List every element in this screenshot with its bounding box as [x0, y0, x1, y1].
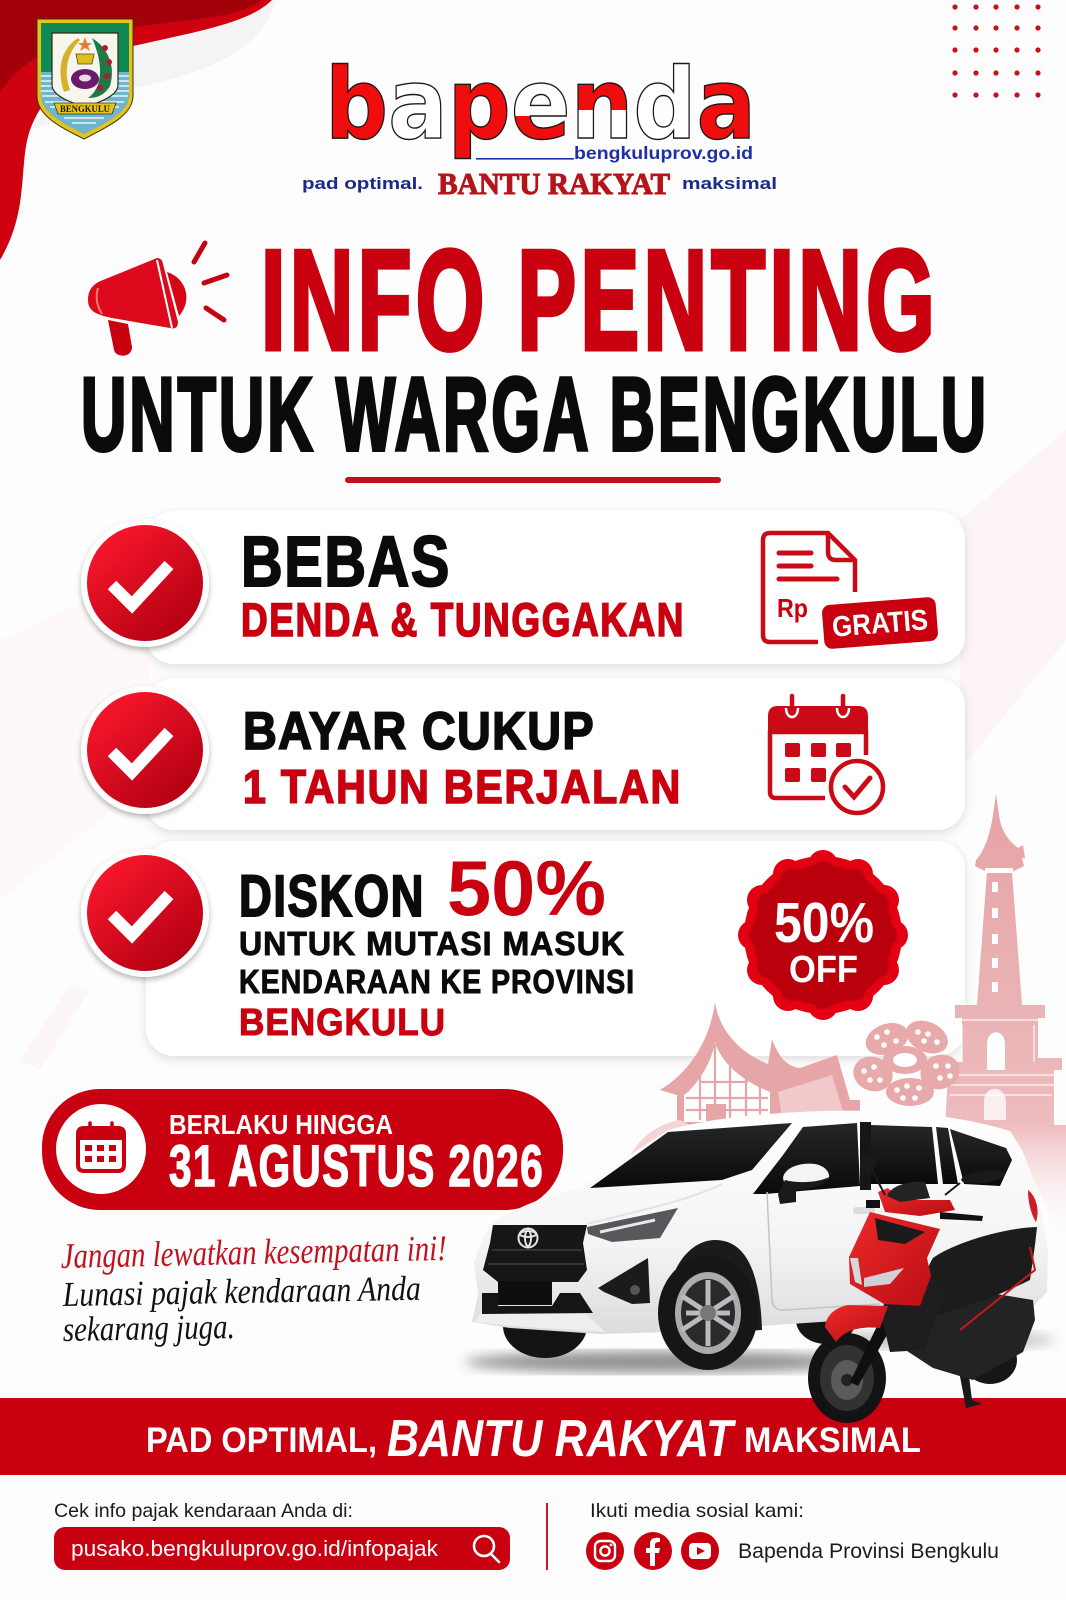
front fork — [850, 1320, 892, 1386]
number plate recess — [498, 1281, 552, 1305]
description line 1: UNTUK MUTASI MASUK — [239, 925, 625, 962]
footer: info text: Cek info pajak kendaraan Anda di: — [54, 1500, 353, 1522]
mirror — [783, 1164, 829, 1188]
tree silhouette — [622, 1120, 700, 1182]
rear windows — [950, 1129, 1012, 1186]
rear wheel — [796, 1296, 856, 1344]
banner: slogan band: PAD OPTIMAL, — [146, 1421, 377, 1460]
hood crease — [587, 1184, 722, 1224]
footer: social name: Bapenda Provinsi Bengkulu — [738, 1540, 999, 1563]
dash dark panel — [875, 1218, 925, 1244]
heading: DISKON: DISKON — [239, 864, 425, 929]
centre black leg shield — [880, 1262, 945, 1352]
mirror right — [960, 1168, 1006, 1186]
seat — [924, 1227, 1037, 1318]
logo url: bengkuluprov.go.id — [574, 143, 753, 163]
far front wheel — [503, 1294, 587, 1358]
label: BERLAKU HINGGA: BERLAKU HINGGA — [169, 1109, 393, 1140]
icon: document with GRATIS stamp — [763, 533, 939, 649]
subheading: DENDA & TUNGGAKAN: DENDA & TUNGGAKAN — [241, 593, 685, 646]
grille — [483, 1225, 587, 1282]
skyline: landmark silhouettes — [622, 794, 1066, 1245]
icon: youtube — [681, 1532, 719, 1570]
subheading: 1 TAHUN BERJALAN: 1 TAHUN BERJALAN — [243, 760, 682, 813]
footer: url pill: pusako.bengkuluprov.go.id/infopajak — [71, 1536, 439, 1561]
door handle — [853, 1207, 875, 1214]
callout: validity pill — [42, 1089, 563, 1210]
car body — [472, 1111, 1048, 1334]
heading: BAYAR CUKUP: BAYAR CUKUP — [243, 702, 595, 761]
windshield — [590, 1123, 792, 1188]
lower skirt — [474, 1314, 605, 1332]
check badge 3 — [81, 849, 209, 977]
icon: document with GRATIS stamp: GRATIS — [831, 604, 929, 644]
pink haze behind vehicles — [880, 1125, 1066, 1245]
badge: 50% off scalloped seal: OFF — [789, 949, 858, 991]
middle window — [871, 1125, 938, 1184]
script line: sekarang juga: sekarang juga. — [62, 1307, 235, 1349]
icon: facebook — [634, 1532, 672, 1570]
fog lamp — [598, 1258, 650, 1304]
toyota emblem — [518, 1228, 538, 1248]
panel: benefit 1 — [81, 511, 965, 664]
front shield — [849, 1212, 940, 1306]
icon: instagram — [586, 1532, 624, 1570]
dot grid top-right — [952, 4, 1041, 98]
banner: slogan band: BANTU RAKYAT — [387, 1410, 737, 1468]
description line 3: BENGKULU — [239, 1002, 446, 1044]
panel: benefit 3 — [81, 841, 965, 1056]
icon: calendar with check — [768, 696, 883, 813]
vehicle: red scooter — [808, 1154, 1037, 1423]
check badge 2 — [81, 686, 209, 814]
logo tagline: pad optimal. — [302, 174, 423, 193]
front wheel — [808, 1333, 886, 1423]
script line: Jangan lewatkan: Jangan lewatkan kesempatan ini! — [60, 1228, 447, 1276]
door line — [767, 1192, 880, 1310]
icon: search — [474, 1536, 499, 1562]
icon: document with GRATIS stamp: Rp — [777, 593, 808, 623]
wheel arch — [667, 1240, 762, 1336]
rear light — [1028, 1190, 1038, 1222]
logo tagline — [302, 166, 777, 201]
rafflesia flower — [848, 1014, 965, 1106]
logo: bapenda: bapenda — [325, 48, 756, 162]
headlight — [587, 1208, 678, 1242]
script line: Lunasi: Lunasi pajak kendaraan Anda — [62, 1269, 421, 1314]
check badge 1 — [81, 519, 209, 647]
front wheel — [658, 1256, 758, 1370]
vehicle: white MPV — [465, 1111, 1055, 1373]
badge: 50% off scalloped seal: 50% — [774, 891, 874, 955]
logo tagline: maksimal — [682, 174, 777, 193]
badge: 50% off scalloped seal — [738, 850, 908, 1020]
logo tagline: BANTU RAKYAT — [438, 166, 670, 201]
headlight — [850, 1258, 862, 1285]
rear wheel — [963, 1336, 1017, 1384]
handlebars — [940, 1212, 983, 1221]
description line 2: KENDARAAN KE PROVINSI — [239, 963, 635, 1000]
rumah adat house — [660, 1002, 860, 1125]
decorative red wave top-left — [0, 0, 276, 260]
lower intake — [482, 1293, 593, 1314]
banner: slogan band: MAKSIMAL — [744, 1421, 921, 1460]
heading: BEBAS: BEBAS — [241, 523, 451, 602]
engine and body — [907, 1282, 1035, 1380]
date: 31 AGUSTUS 2026: 31 AGUSTUS 2026 — [169, 1134, 544, 1199]
footer: url pill — [54, 1527, 510, 1570]
stand — [958, 1366, 982, 1408]
panel: benefit 2 — [81, 678, 965, 830]
icon: megaphone — [88, 243, 227, 356]
crest: Bengkulu province shield: BENGKULU — [60, 104, 110, 114]
handlebar cover — [878, 1188, 955, 1216]
banner: slogan band — [0, 1398, 1066, 1475]
footer: social label: Ikuti media sosial kami: — [590, 1500, 804, 1522]
heading figure: 50%: 50% — [447, 844, 606, 932]
crest: Bengkulu province shield — [37, 19, 133, 139]
tower — [945, 794, 1062, 1126]
icon: calendar in circle — [56, 1104, 146, 1194]
front side window — [753, 1123, 860, 1194]
front fender — [825, 1305, 888, 1342]
mirror left — [860, 1154, 876, 1172]
